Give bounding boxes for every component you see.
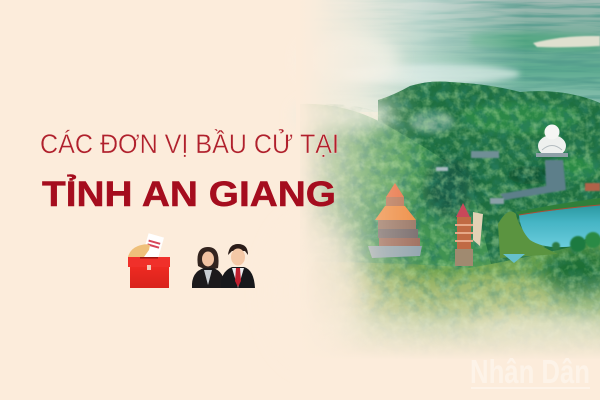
large pagoda [368,183,422,258]
photo: landscape with pagodas and lake [304,0,600,354]
man [221,244,255,288]
temple path and buildings [436,151,600,204]
small pagoda [455,203,473,266]
ballot paper [142,233,164,261]
buddha statue [536,124,568,157]
icon: ballot box [128,233,170,288]
title line 2: TỈNH AN GIANG [42,174,336,214]
lower forest [328,243,600,354]
woman [192,247,226,288]
icon: two candidates [192,244,255,288]
fade overlays [275,0,600,400]
forested hills [304,82,600,268]
lake [473,198,600,263]
title line 1: CÁC ĐƠN VỊ BẦU CỬ TẠI [40,129,339,159]
hand [128,244,150,257]
plains and sky [296,0,600,112]
